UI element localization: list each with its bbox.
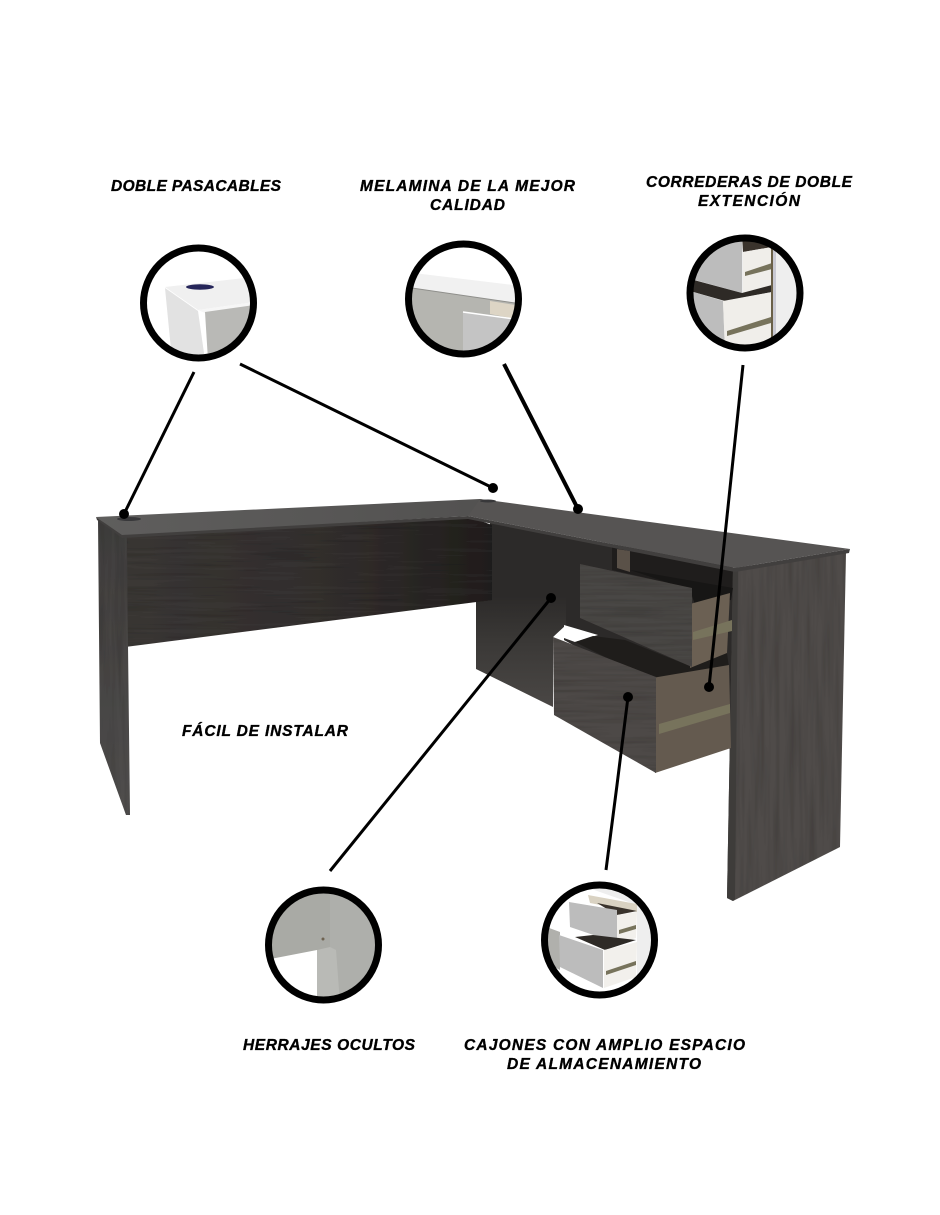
label: correderas de doble extención: EXTENCIÓN xyxy=(698,192,801,210)
left leg xyxy=(98,520,130,815)
line: doble pasacables left xyxy=(124,372,194,514)
label: cajones con amplio espacio de almacenamiento xyxy=(464,1037,745,1073)
label: melamina de la mejor calidad xyxy=(360,178,576,214)
right leg front edge xyxy=(727,568,738,901)
circle detail: cable pass xyxy=(140,245,258,361)
central cabinet wall xyxy=(490,522,734,750)
label: fácil de instalar: FÁCIL DE INSTALAR xyxy=(182,723,349,740)
L-shaped desk illustration xyxy=(96,499,850,901)
label: correderas de doble extención xyxy=(646,174,853,210)
label: cajones con amplio espacio de almacenamiento: DE ALMACENAMIENTO xyxy=(507,1056,701,1073)
label: doble pasacables: DOBLE PASACABLES xyxy=(111,178,282,195)
lower drawer interior xyxy=(575,636,729,682)
desktop surface left xyxy=(96,499,500,536)
label: melamina de la mejor calidad: CALIDAD xyxy=(430,197,505,214)
right leg xyxy=(727,552,846,901)
label: correderas de doble extención: CORREDERAS DE DOBLE xyxy=(646,174,853,191)
label: melamina de la mejor calidad: MELAMINA DE LA MEJOR xyxy=(360,178,576,195)
dot xyxy=(704,682,714,692)
desktop front edge xyxy=(96,516,850,572)
back modesty panel xyxy=(125,517,492,647)
label: cajones con amplio espacio de almacenamiento: CAJONES CON AMPLIO ESPACIO xyxy=(464,1037,745,1054)
cable pass right xyxy=(480,500,496,502)
upper drawer slide xyxy=(693,620,732,640)
label: herrajes ocultos: HERRAJES OCULTOS xyxy=(243,1037,416,1054)
dot xyxy=(546,593,556,603)
circle detail: drawer slides xyxy=(687,235,803,351)
desktop surface right xyxy=(468,499,850,568)
middle support leg xyxy=(476,596,566,707)
gap between drawers xyxy=(564,625,598,642)
upper drawer side xyxy=(690,593,730,668)
line: doble pasacables right xyxy=(240,364,493,488)
cable pass left xyxy=(117,517,141,521)
alcove above drawers xyxy=(612,546,735,590)
circle detail: hidden hardware xyxy=(265,887,383,1003)
dot xyxy=(623,692,633,702)
alcove inner side xyxy=(617,549,630,572)
line: cajones xyxy=(606,697,628,870)
line: herrajes xyxy=(330,598,551,871)
dot xyxy=(573,504,583,514)
circle detail: drawers xyxy=(541,882,660,998)
dot xyxy=(488,483,498,493)
pointer lines xyxy=(124,364,743,871)
line: melamina xyxy=(504,364,578,509)
lower drawer side xyxy=(652,665,731,773)
dot xyxy=(119,509,129,519)
pointer dots xyxy=(119,483,714,702)
lower drawer slide xyxy=(659,704,730,734)
infographic canvas xyxy=(96,176,852,1070)
circle detail: melamine xyxy=(405,241,523,360)
line: correderas xyxy=(709,365,743,687)
upper drawer interior xyxy=(630,570,733,605)
lower drawer front xyxy=(553,637,656,773)
upper drawer front xyxy=(580,564,692,667)
